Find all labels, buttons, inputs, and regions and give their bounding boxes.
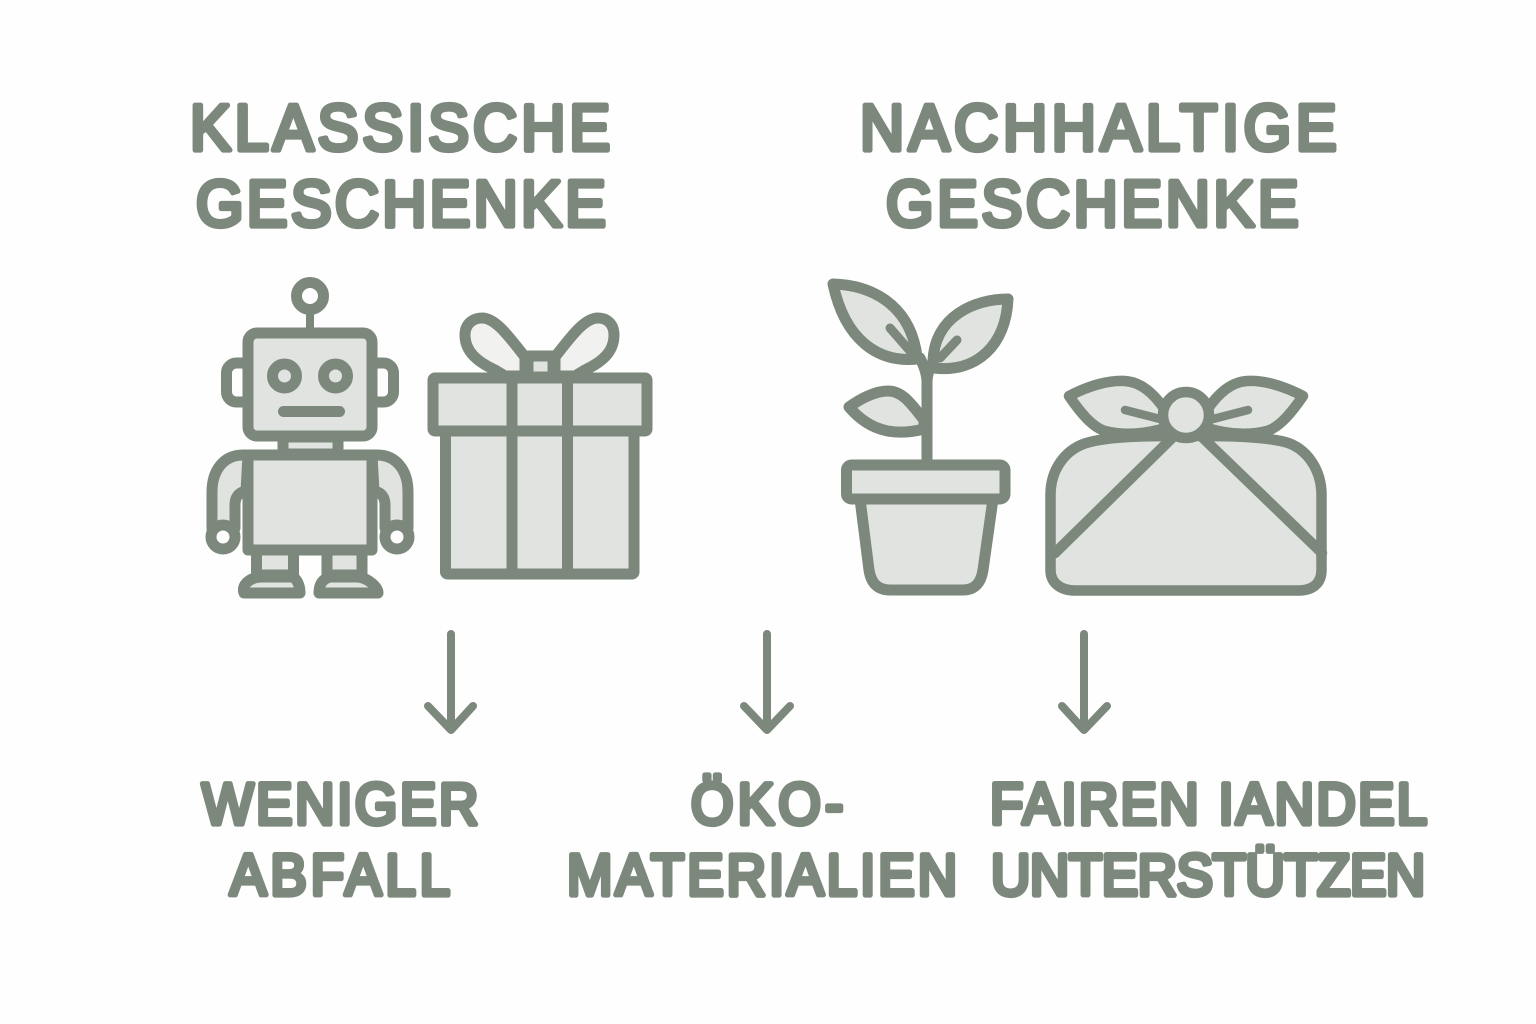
heading: nachhaltige geschenke: NACHHALTIGE xyxy=(860,92,1337,164)
icon: gift box xyxy=(433,318,647,574)
arrow: fairen handel xyxy=(1062,634,1107,730)
label: fairen handel unterstützen: UNTERSTÜTZEN xyxy=(991,842,1425,907)
label: öko-materialien: MATERIALIEN xyxy=(567,842,957,907)
label: öko-materialien xyxy=(567,771,957,907)
label: weniger abfall: ABFALL xyxy=(230,842,450,907)
heading: nachhaltige geschenke xyxy=(860,92,1337,240)
heading: klassische geschenke: KLASSISCHE xyxy=(190,92,610,164)
icon: furoshiki wrapped gift xyxy=(1050,381,1322,590)
label: weniger abfall xyxy=(202,771,478,907)
label: weniger abfall: WENIGER xyxy=(202,771,478,836)
label: fairen handel unterstützen xyxy=(990,771,1427,907)
heading: klassische geschenke: GESCHENKE xyxy=(196,168,606,240)
label: öko-materialien: ÖKO- xyxy=(691,771,843,836)
icon: robot xyxy=(211,282,409,593)
arrow: weniger abfall xyxy=(428,634,473,730)
heading: klassische geschenke xyxy=(190,92,610,240)
icon: potted plant xyxy=(833,284,1008,590)
heading: nachhaltige geschenke: GESCHENKE xyxy=(886,168,1299,240)
label: fairen handel unterstützen: FAIREN IANDEL xyxy=(990,771,1427,836)
arrow: öko-materialien xyxy=(744,634,790,730)
